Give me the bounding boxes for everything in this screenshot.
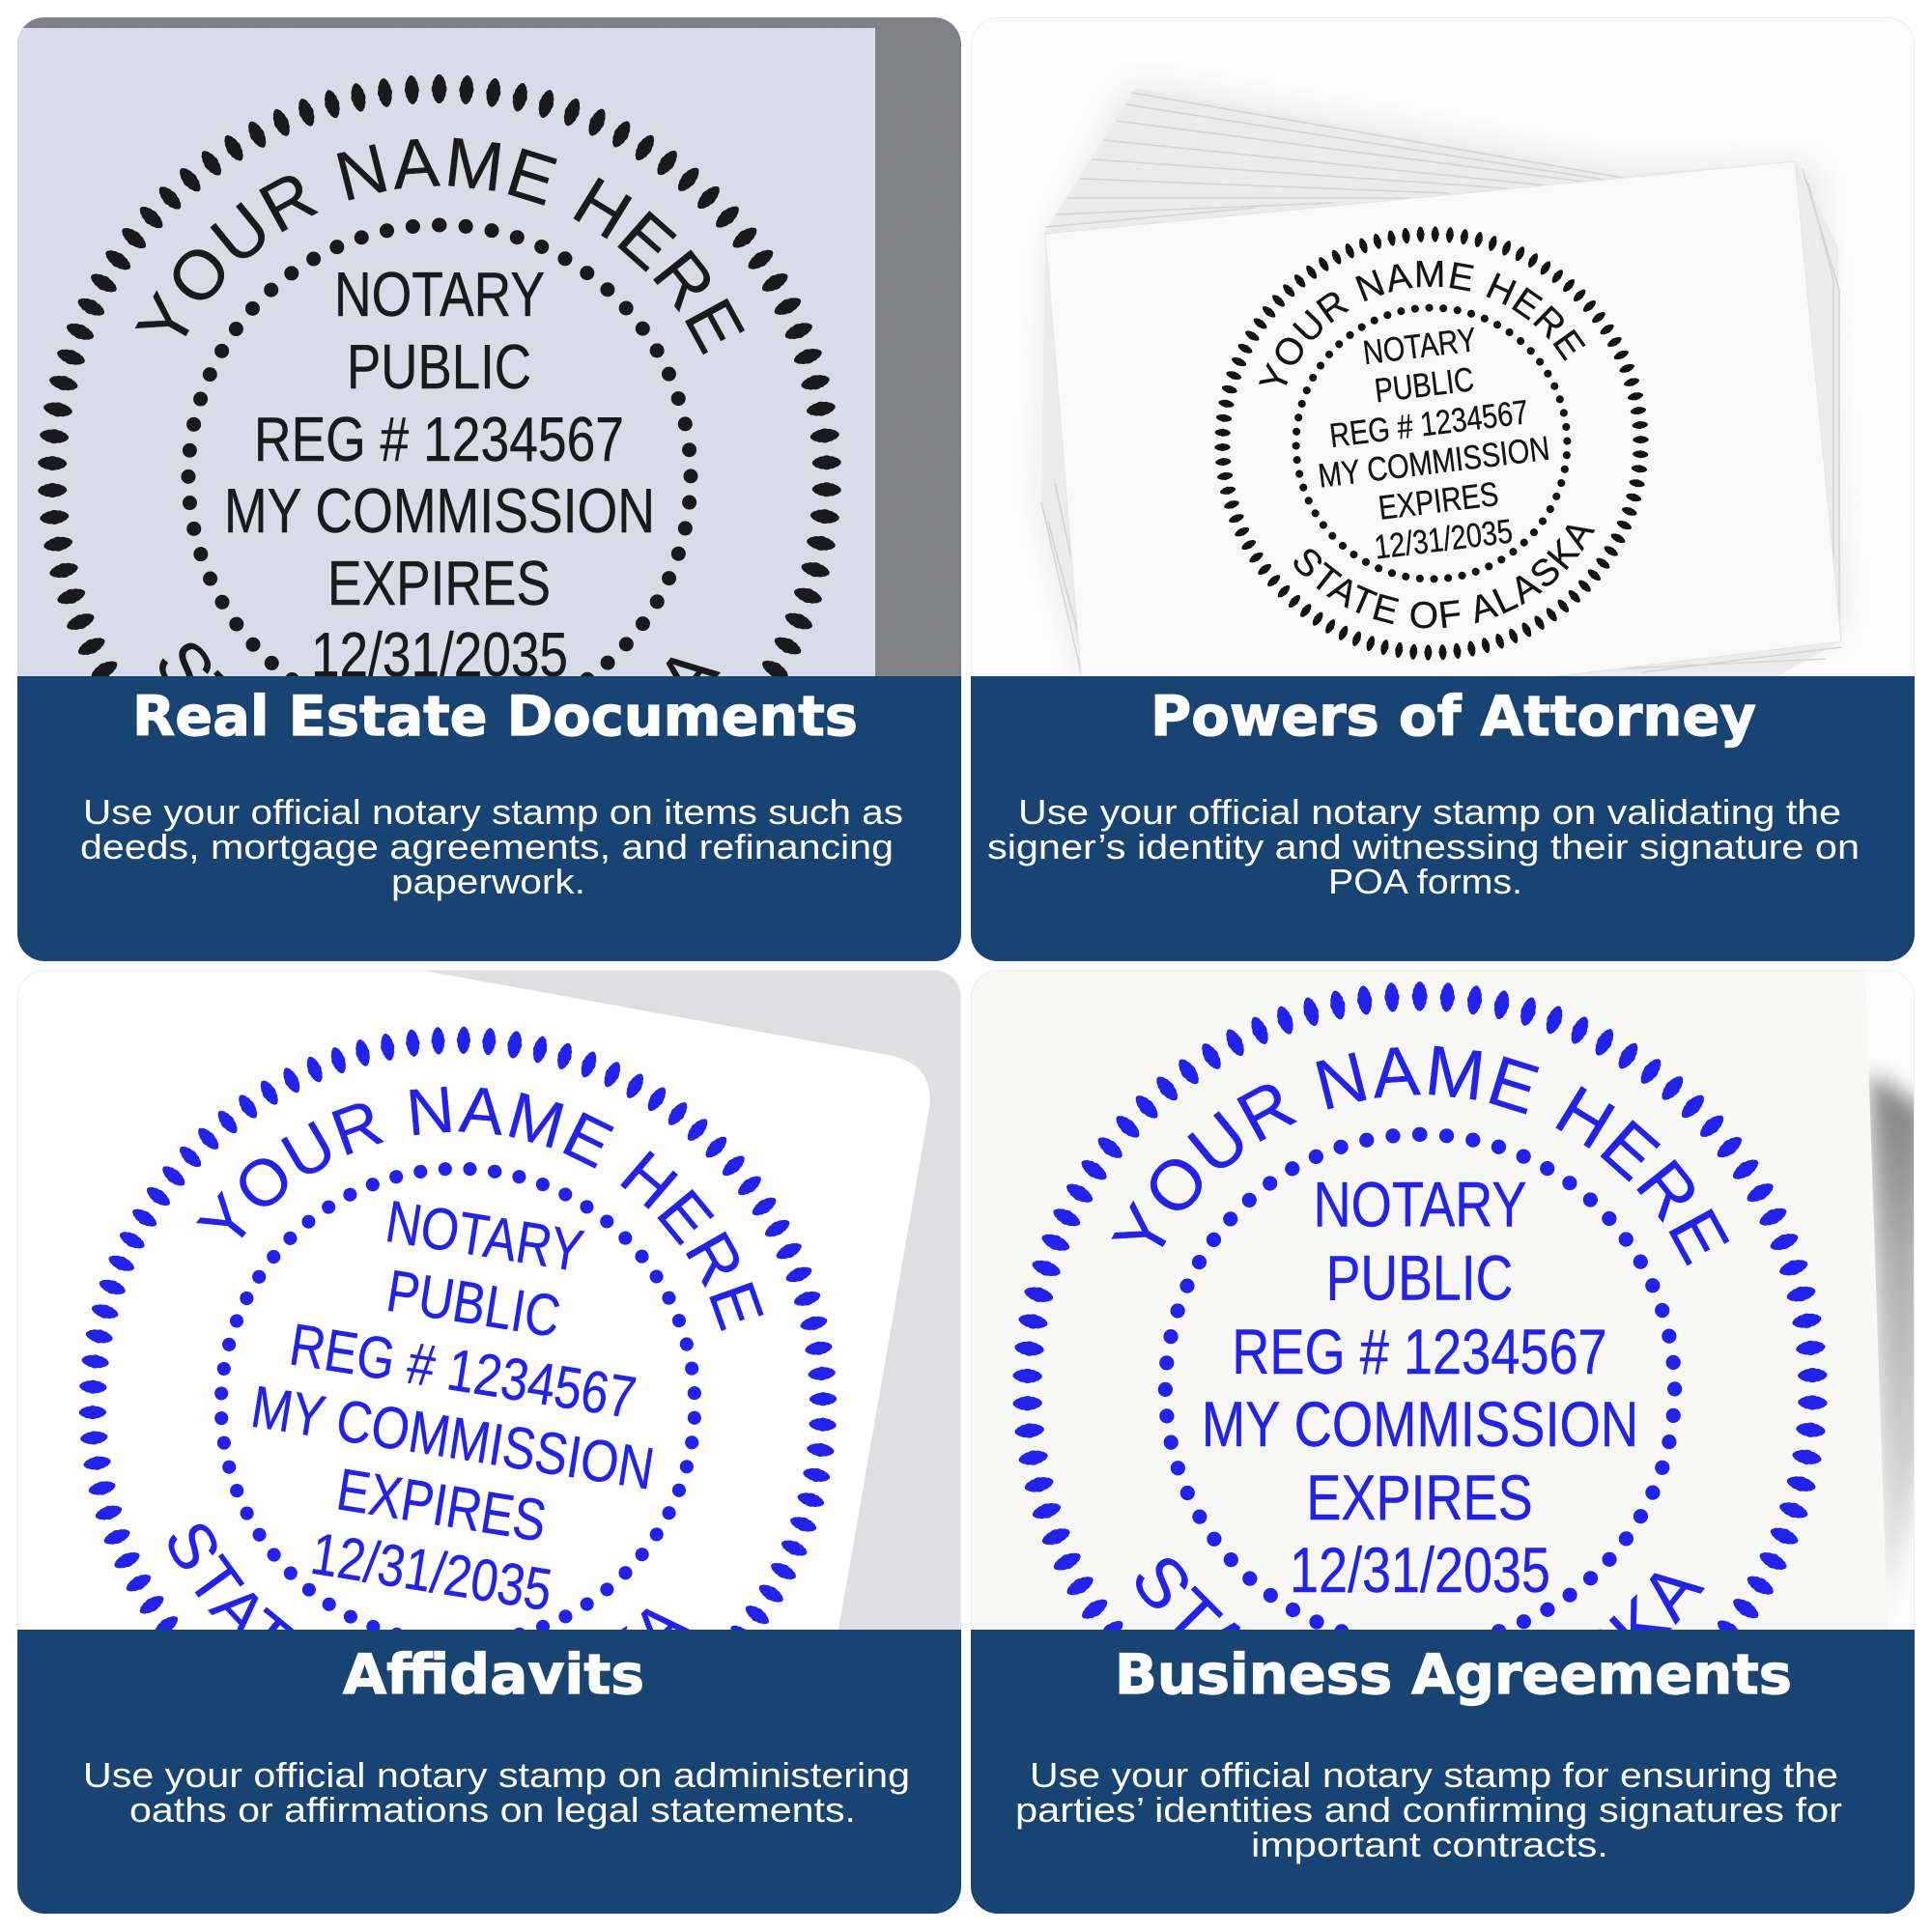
panel: business agreements [971,970,1915,1914]
description [80,792,903,901]
stamp impression: blue straight: REG # 1234567 [1232,1316,1607,1387]
description: Use your official notary stamp on validating the [1018,792,1841,832]
stamp impression: blue straight: PUBLIC [1326,1242,1513,1314]
caption block [971,1630,1915,1914]
description: Use your official notary stamp for ensuring the [1030,1755,1838,1795]
stamp impression: small black: EXPIRES [1377,475,1500,527]
stamp impression: blue tilted: REG # 1234567 [285,1311,640,1431]
stamp impression: black: MY COMMISSION [224,475,655,546]
photo: stack of white sheets with black stamp [971,17,1915,676]
description: Use your official notary stamp on administering [83,1755,910,1795]
heading: Business Agreements [1115,1643,1792,1707]
stamp impression: blue straight: 12/31/2035 [1290,1534,1550,1605]
caption block [971,676,1915,961]
stamp impression: black [38,74,841,676]
heading: Real Estate Documents [132,685,858,749]
description: POA forms. [1328,862,1522,901]
description: oaths or affirmations on legal statements. [129,1790,856,1830]
description: important contracts. [1251,1825,1608,1864]
stamp impression: black: PUBLIC [347,331,531,402]
stamp impression: blue straight: NOTARY [1313,1169,1527,1240]
description [987,792,1860,901]
stamp impression: blue tilted: EXPIRES [332,1456,551,1554]
stamp impression: small black: PUBLIC [1373,360,1476,410]
stamp impression: black: EXPIRES [327,548,551,618]
panel: powers of attorney [971,17,1915,961]
stamp impression: blue straight [1012,981,1828,1630]
description: parties’ identities and confirming signatures for [1015,1790,1842,1830]
stamp impression: small black [1214,226,1649,661]
stamp impression: blue straight: YOUR NAME HERE [1111,1045,1729,1265]
stamp impression: black: STATE OF ALASKA [159,643,721,676]
photo: off-white paper with blue stamp [971,970,1915,1630]
description [83,1755,910,1830]
heading: Affidavits [343,1643,644,1707]
stamp impression: blue straight: MY COMMISSION [1202,1388,1638,1460]
stamp impression: blue tilted: YOUR NAME HERE [195,1086,764,1331]
stamp impression: blue tilted: STATE OF ALASKA [168,1524,690,1630]
stamp impression: black: 12/31/2035 [311,619,568,690]
stamp impression: blue straight: STATE OF ALASKA [1136,1558,1705,1630]
stamp impression: small black: 12/31/2035 [1373,512,1515,567]
panel: affidavits [17,970,961,1914]
description: signer’s identity and witnessing their signature on [987,827,1860,867]
description [1015,1755,1842,1864]
panel: real estate documents [17,17,961,961]
stamp impression: black: REG # 1234567 [254,404,624,474]
photo: black stamp on lavender paper [17,17,961,676]
stamp impression: blue tilted: PUBLIC [383,1258,565,1350]
description: paperwork. [391,862,585,901]
description: deeds, mortgage agreements, and refinancing [80,827,894,867]
stamp impression: blue tilted [79,1026,837,1630]
caption block [17,676,961,961]
caption block [17,1630,961,1914]
stamp impression: blue tilted: NOTARY [382,1188,588,1284]
stamp impression: blue straight: EXPIRES [1306,1462,1533,1533]
stamp impression: black: NOTARY [334,259,545,329]
stamp impression: black: YOUR NAME HERE [135,137,745,355]
stamp impression: small black: REG # 1234567 [1327,393,1530,455]
stamp impression: small black: STATE OF ALASKA [1294,526,1596,628]
stamp impression: blue tilted: 12/31/2035 [307,1520,556,1623]
stamp impression: small black: YOUR NAME HERE [1258,261,1586,385]
photo: tilted white card with blue stamp [17,970,961,1630]
stamp impression: blue tilted: MY COMMISSION [247,1374,659,1502]
stamp impression: small black: NOTARY [1361,321,1478,372]
description: Use your official notary stamp on items such as [83,792,903,832]
heading: Powers of Attorney [1151,685,1756,749]
stamp impression: small black: MY COMMISSION [1317,430,1551,496]
